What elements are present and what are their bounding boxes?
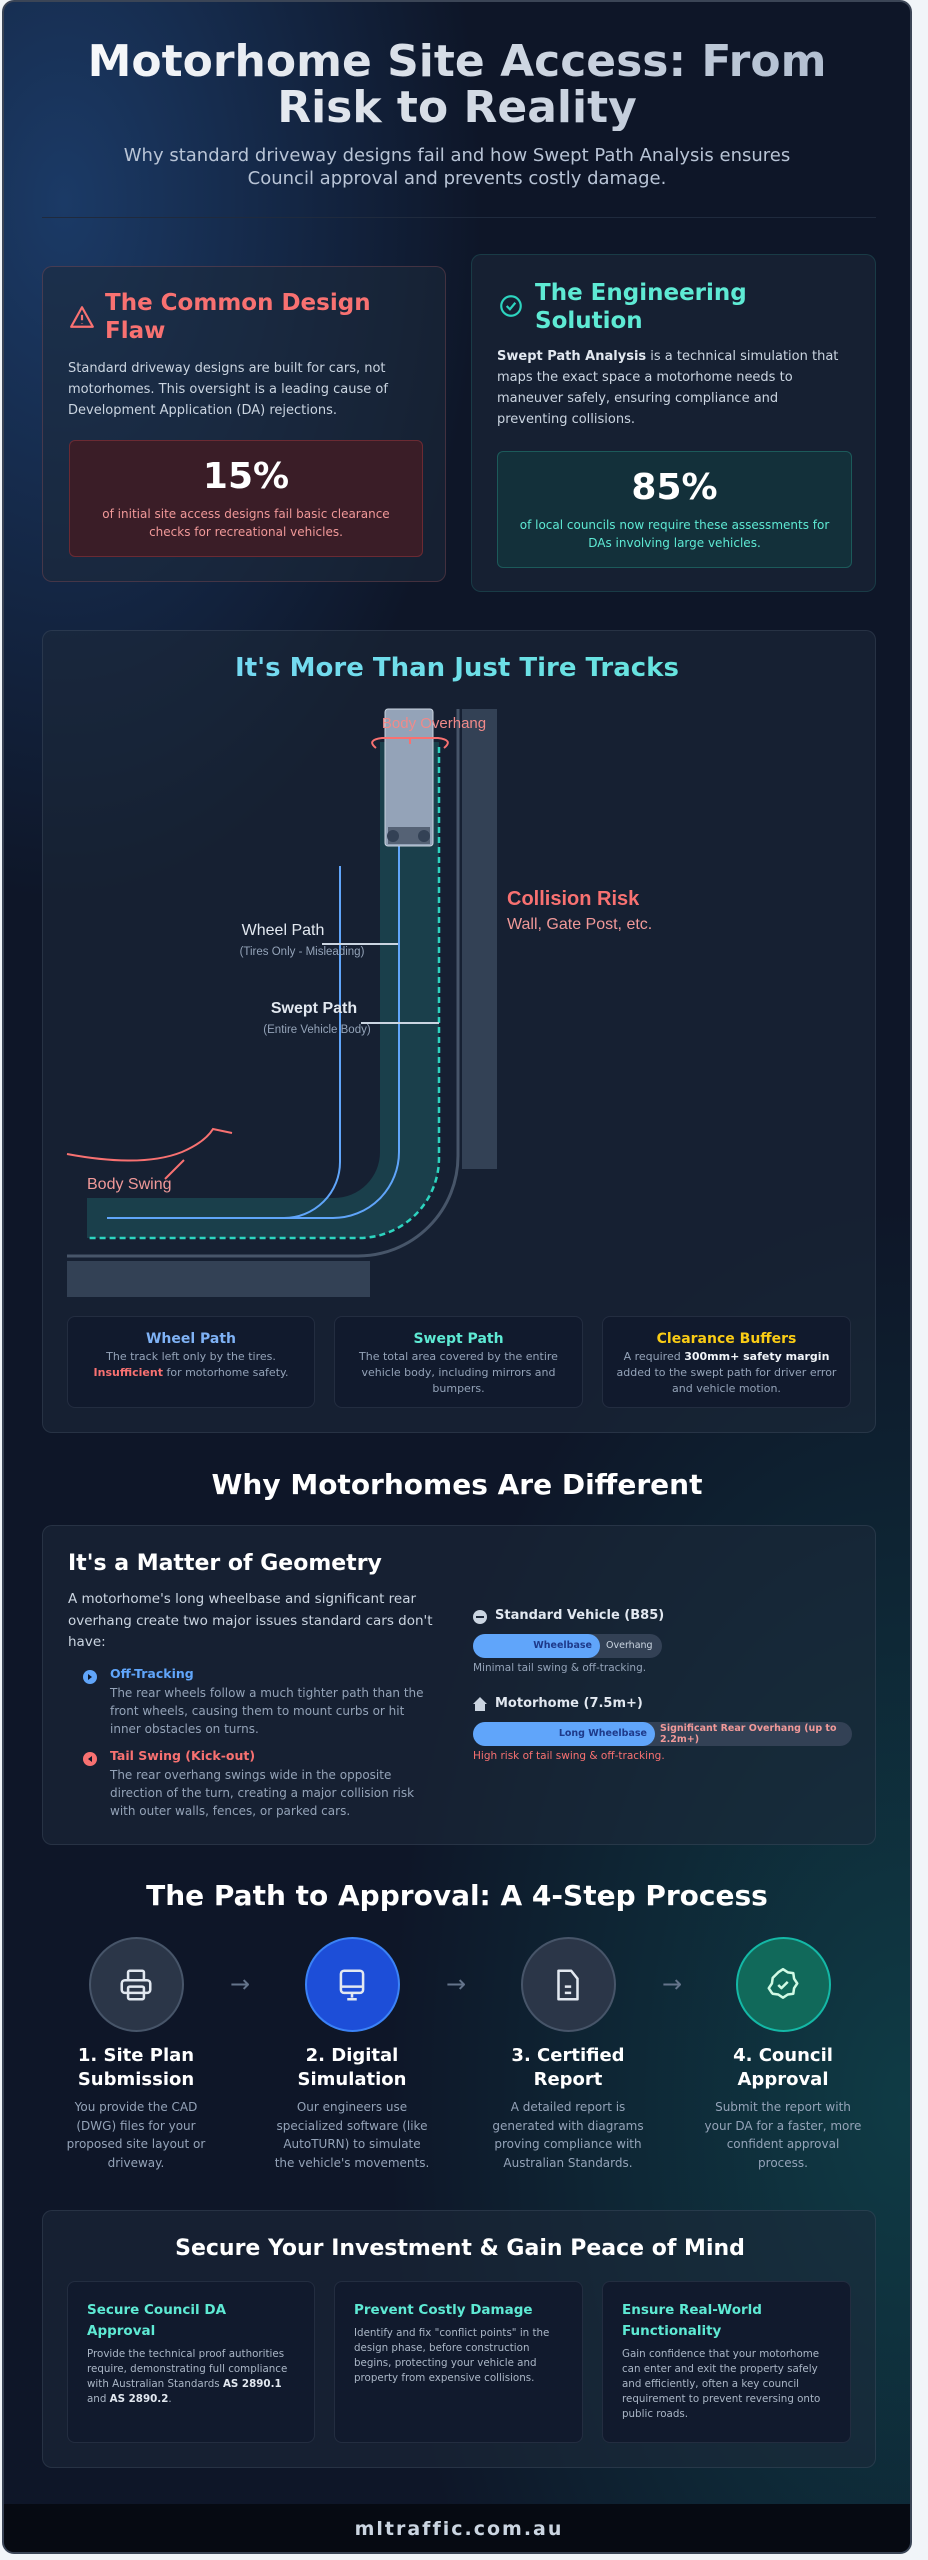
chart: standard vehicle: Minimal tail swing & off-tracking. bbox=[473, 1662, 646, 1674]
chart: motorhome: High risk of tail swing & off-tracking. bbox=[473, 1750, 665, 1762]
stat: 85%: of local councils now require these assessments for bbox=[520, 518, 829, 532]
title: Risk to Reality bbox=[277, 82, 637, 133]
panel: secure investment bbox=[42, 2210, 876, 2468]
stat: 15% bbox=[69, 440, 423, 557]
benefit: council DA: Secure Council DA Approval bbox=[87, 2302, 226, 2339]
item: tail swing: Tail Swing (Kick-out) bbox=[110, 1748, 255, 1763]
chart: motorhome bbox=[473, 1696, 852, 1762]
step 1 bbox=[67, 1937, 206, 2170]
step 2: 2. Digital Simulation bbox=[298, 2045, 406, 2090]
icon: warning bbox=[70, 306, 94, 328]
label: wheel path: Wheel Path bbox=[242, 922, 324, 939]
callout: collision risk: Collision Risk bbox=[507, 888, 640, 910]
legend: swept path: The total area covered by the entire vehicle body, including mirrors and bumpers. bbox=[359, 1350, 558, 1395]
callout: collision risk bbox=[507, 888, 652, 933]
legend: swept path: Swept Path bbox=[413, 1331, 504, 1347]
chart: motorhome: Long Wheelbase bbox=[559, 1728, 647, 1739]
chart: standard vehicle: Standard Vehicle (B85) bbox=[495, 1608, 664, 1623]
chart: standard vehicle: Overhang bbox=[606, 1640, 653, 1651]
heading: It's a Matter of Geometry bbox=[68, 1551, 382, 1576]
benefit: council DA: Provide the technical proof authorities require, demonstrating full compliance with Australian Standards AS 2890.1 and AS 2890.2. bbox=[87, 2348, 287, 2405]
heading: The Common Design Flaw bbox=[105, 290, 371, 344]
step 1: You provide the CAD (DWG) files for your proposed site layout or driveway. bbox=[67, 2100, 205, 2170]
panel: tire tracks diagram bbox=[42, 630, 876, 1433]
text: Swept Path Analysis is a technical simulation that maps the exact space a motorhome needs to maneuver safely, ensuring compliance and preventing collisions. bbox=[497, 349, 838, 427]
panel: engineering solution bbox=[471, 254, 876, 592]
panel: geometry bbox=[42, 1525, 876, 1845]
step 3: A detailed report is generated with diagrams proving compliance with Australian Standards. bbox=[492, 2100, 644, 2170]
stat: 15%: of initial site access designs fail basic clearance bbox=[102, 507, 390, 521]
arrow: → bbox=[662, 1970, 682, 1998]
legend: clearance buffers bbox=[602, 1316, 851, 1408]
legend: wheel path: Wheel Path bbox=[146, 1331, 236, 1347]
item: tail swing bbox=[83, 1748, 414, 1818]
item: off-tracking: The rear wheels follow a much tighter path than the front wheels, causing them to mount curbs or hit inner obstacles on turns. bbox=[110, 1686, 424, 1736]
stat: 85% bbox=[497, 451, 852, 568]
step 4: Submit the report with your DA for a faster, more confident approval process. bbox=[705, 2100, 861, 2170]
label: swept path: Swept Path bbox=[271, 1000, 357, 1017]
title bbox=[4, 39, 910, 131]
subtitle bbox=[124, 145, 790, 189]
chart: swept path diagram bbox=[66, 708, 652, 1297]
callout: body overhang: Body Overhang bbox=[382, 715, 486, 732]
arrow: → bbox=[446, 1970, 466, 1998]
callout: body overhang bbox=[372, 715, 486, 748]
benefit: prevent damage: Identify and fix "conflict points" in the design phase, before construction begins, protecting your vehicle and property from expensive collisions. bbox=[354, 2327, 549, 2384]
step 3: 3. Certified Report bbox=[511, 2045, 625, 2090]
benefit: prevent damage bbox=[334, 2281, 583, 2443]
icon: check circle bbox=[500, 295, 522, 317]
legend: wheel path: Insufficient for motorhome safety. bbox=[94, 1366, 288, 1379]
title: Motorhome Site Access: From bbox=[88, 36, 826, 87]
heading: tire tracks bbox=[4, 652, 910, 684]
step 4: 4. Council Approval bbox=[733, 2045, 833, 2090]
callout: body swing: Body Swing bbox=[87, 1176, 172, 1193]
icon: document bbox=[520, 1937, 616, 2032]
chart: standard vehicle: Wheelbase bbox=[533, 1640, 592, 1651]
item: off-tracking: Off-Tracking bbox=[110, 1666, 194, 1681]
label: wheel path: (Tires Only - Misleading) bbox=[240, 946, 365, 958]
subtitle: Why standard driveway designs fail and how Swept Path Analysis ensures bbox=[124, 145, 790, 166]
benefit: functionality: Ensure Real-World Functionality bbox=[622, 2302, 762, 2339]
benefit: functionality bbox=[602, 2281, 851, 2443]
text: Standard driveway designs are built for cars, not motorhomes. This oversight is a leading cause of Development Application (DA) rejections. bbox=[68, 361, 388, 418]
callout: collision risk: Wall, Gate Post, etc. bbox=[507, 916, 652, 933]
benefit: functionality: Gain confidence that your motorhome can enter and exit the property safely and efficiently, often a key council requirement to prevent reversing onto public roads. bbox=[622, 2348, 820, 2420]
subtitle: Council approval and prevents costly damage. bbox=[248, 168, 666, 189]
benefit: council DA bbox=[67, 2281, 315, 2443]
chart: standard vehicle bbox=[473, 1608, 664, 1674]
item: off-tracking bbox=[83, 1666, 424, 1736]
icon: monitor bbox=[304, 1937, 400, 2032]
step 3 bbox=[492, 1937, 644, 2170]
step 1: 1. Site Plan Submission bbox=[78, 2045, 194, 2090]
stat: 85%: 85% bbox=[631, 467, 718, 508]
legend: wheel path bbox=[67, 1316, 315, 1408]
panel: common design flaw bbox=[42, 266, 446, 582]
text: A motorhome's long wheelbase and significant rear overhang create two major issues standard cars don't have: bbox=[68, 1591, 433, 1650]
label: wheel path bbox=[240, 922, 398, 958]
heading: Secure Your Investment & Gain Peace of Mind bbox=[175, 2236, 745, 2261]
label: swept path: (Entire Vehicle Body) bbox=[263, 1024, 371, 1036]
step 4 bbox=[704, 1937, 861, 2170]
heading: why motorhomes: Why Motorhomes Are Different bbox=[212, 1468, 702, 1501]
heading: The Engineering Solution bbox=[535, 280, 747, 334]
heading: tire tracks: It's More Than Just Tire Tracks bbox=[235, 653, 679, 683]
legend: wheel path: The track left only by the tires. bbox=[106, 1350, 276, 1363]
icon: badge check bbox=[736, 1937, 830, 2032]
chart: motorhome: Significant Rear Overhang (up to 2.2m+) bbox=[660, 1723, 836, 1745]
footer: mltraffic.com.au bbox=[355, 2518, 563, 2540]
stat: 15%: 15% bbox=[203, 456, 289, 497]
icon: motorhome bbox=[385, 709, 433, 846]
stat: 15%: checks for recreational vehicles. bbox=[149, 525, 343, 539]
callout: body swing bbox=[67, 1129, 232, 1193]
benefit: prevent damage: Prevent Costly Damage bbox=[354, 2302, 533, 2318]
legend: clearance buffers: A required 300mm+ safety margin added to the swept path for driver error and vehicle motion. bbox=[617, 1350, 836, 1395]
step 2 bbox=[275, 1937, 429, 2170]
chart: motorhome: Motorhome (7.5m+) bbox=[495, 1696, 643, 1711]
legend: clearance buffers: Clearance Buffers bbox=[657, 1331, 796, 1347]
step 2: Our engineers use specialized software (like AutoTURN) to simulate the vehicle's movements. bbox=[275, 2100, 429, 2170]
arrow: → bbox=[230, 1970, 250, 1998]
footer bbox=[4, 2504, 914, 2556]
item: tail swing: The rear overhang swings wide in the opposite direction of the turn, creating a major collision risk with outer walls, fences, or parked cars. bbox=[110, 1768, 414, 1818]
label: swept path bbox=[263, 1000, 439, 1036]
icon: printer bbox=[88, 1937, 184, 2032]
heading: path to approval: The Path to Approval: A 4-Step Process bbox=[146, 1879, 768, 1912]
legend: swept path bbox=[334, 1316, 583, 1408]
stat: 85%: DAs involving large vehicles. bbox=[588, 536, 761, 550]
